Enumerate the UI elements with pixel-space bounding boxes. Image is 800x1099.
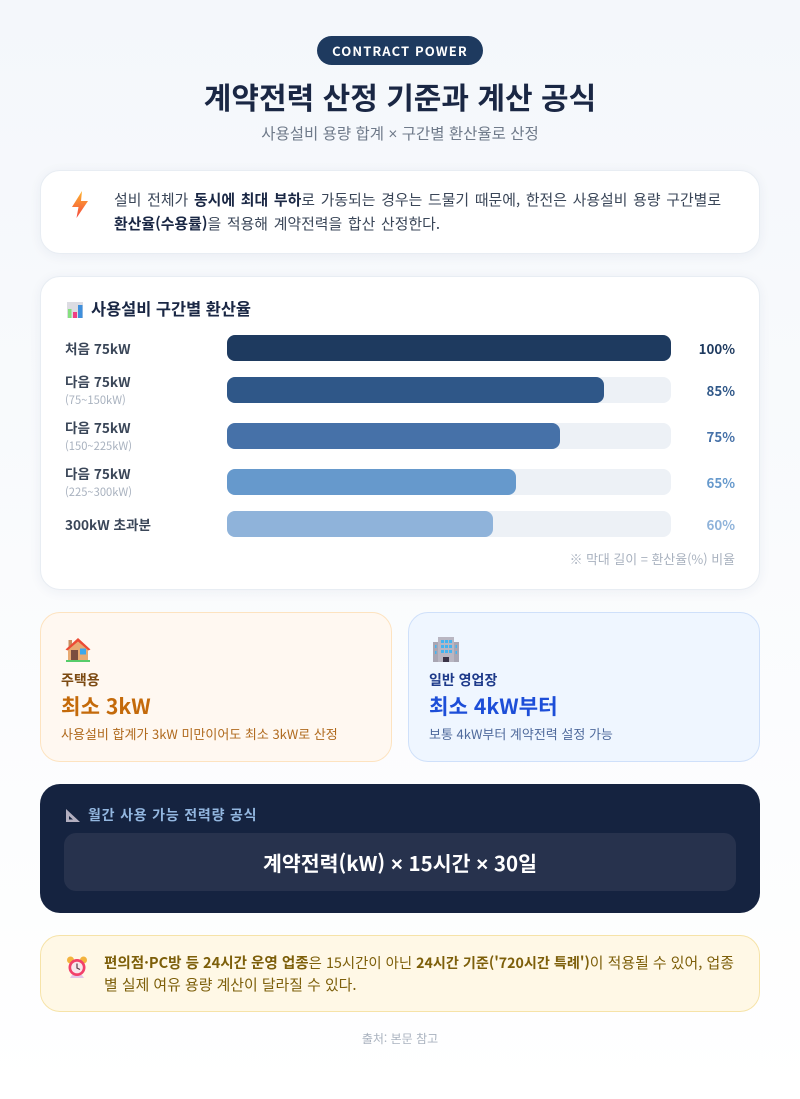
bar: 100% [227,335,671,361]
chart footnote: ※ 막대 길이 = 환산율(%) 비율 [570,549,735,568]
chart heading: 사용설비 구간별 환산율 [91,296,251,320]
value: 85%: 85% [706,381,735,400]
value: 최소 3kW [61,690,151,721]
description: 사용설비 합계가 3kW 미만이어도 최소 3kW로 산정 [61,724,338,743]
value: 100%: 100% [699,339,735,358]
intro text: 설비 전체가 동시에 최대 부하로 가동되는 경우는 드물기 때문에, 한전은 사용설비 용량 구간별로 [114,189,721,210]
icon: house [66,638,90,662]
panel: conversion rate chart [40,276,760,590]
source: 출처: 본문 참고 [362,1030,438,1047]
formula box: 계약전력(kW) × 15시간 × 30일 [263,847,537,877]
category label: 주택용 [61,670,100,690]
intro text [114,189,721,234]
range label: (150~225kW) [65,438,132,454]
panel: general business [408,612,760,762]
panel: residential [40,612,392,762]
panel: formula [40,784,760,913]
bar row: next 75kW (225~300kW): 다음 75kW [65,463,131,483]
icon: alarm clock [67,956,87,978]
bar: 75% [227,423,671,449]
note text: 편의점·PC방 등 24시간 운영 업종은 15시간이 아닌 24시간 기준('720시간 특례')이 적용될 수 있어, 업종 [104,952,734,972]
value: 60%: 60% [706,515,735,534]
bar row: next 75kW (150~225kW): 다음 75kW [65,417,131,437]
intro text: 환산율(수용률)을 적용해 계약전력을 합산 산정한다. [114,213,440,234]
panel: 24-hour note [40,935,760,1012]
description: 보통 4kW부터 계약전력 설정 가능 [429,724,613,743]
panel: intro [40,170,760,254]
badge [317,36,483,65]
bar: 60% [227,511,671,537]
value: 75%: 75% [706,427,735,446]
range label: (75~150kW) [65,392,126,408]
range label: (225~300kW) [65,484,132,500]
badge: CONTRACT POWER [332,41,468,60]
bar row: first 75kW: 처음 75kW [65,338,131,358]
category label: 일반 영업장 [429,670,497,690]
note text: 별 실제 여유 용량 계산이 달라질 수 있다. [104,974,357,994]
subtitle: 사용설비 용량 합계 × 구간별 환산율로 산정 [261,122,539,144]
icon: lightning [72,191,88,218]
bar: 65% [227,469,671,495]
formula box [64,833,736,891]
formula heading: 월간 사용 가능 전력량 공식 [88,805,257,825]
bar row: next 75kW (75~150kW): 다음 75kW [65,371,131,391]
value: 최소 4kW부터 [429,690,558,721]
bar row: over 300kW: 300kW 초과분 [65,514,151,534]
icon: office building [433,637,459,662]
value: 65%: 65% [706,473,735,492]
bar: 85% [227,377,671,403]
note text [104,952,734,994]
title: 계약전력 산정 기준과 계산 공식 [204,74,596,118]
